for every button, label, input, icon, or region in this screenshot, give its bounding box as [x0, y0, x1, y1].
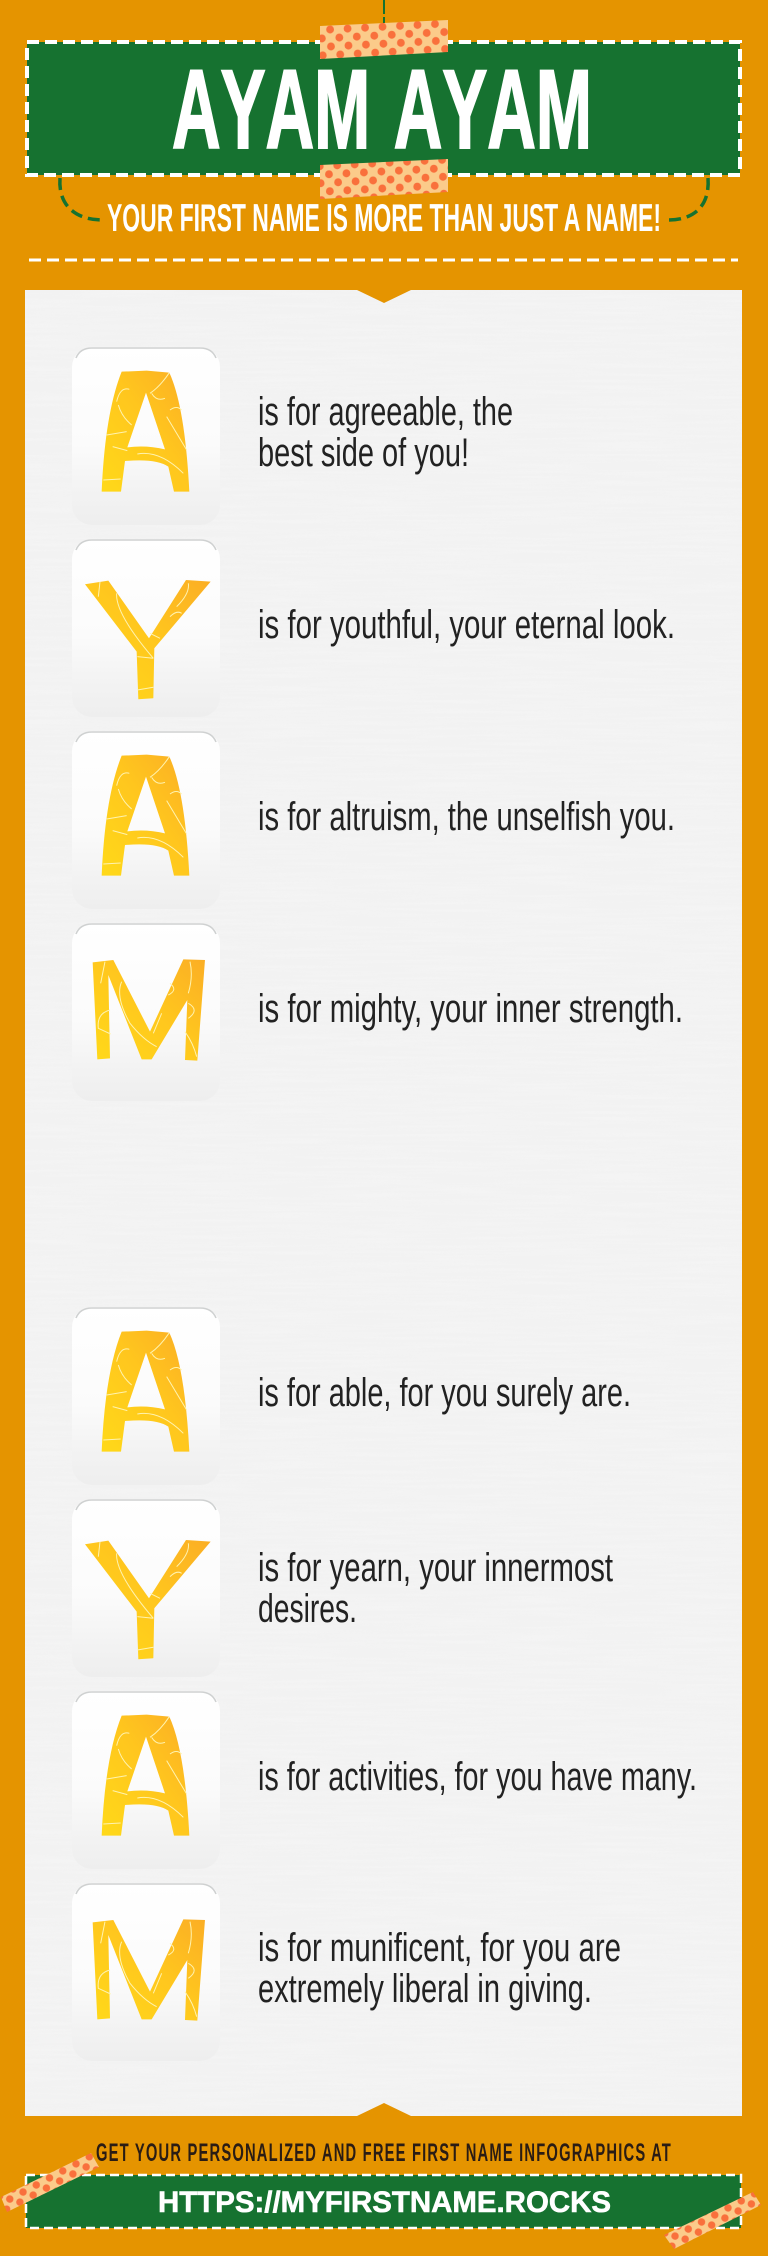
row: A activities	[72, 1691, 697, 1869]
text: is for munificent, for you are	[258, 1926, 621, 1970]
row: M munificent	[72, 1883, 621, 2061]
text	[258, 390, 513, 475]
title banner	[27, 42, 740, 175]
letter tile A	[72, 1307, 220, 1485]
main panel	[25, 290, 742, 2116]
letter tile Y	[72, 1499, 220, 1677]
row: Y yearn	[72, 1499, 613, 1677]
text: desires.	[258, 1587, 357, 1631]
letter tile M	[72, 1883, 220, 2061]
row: A altruism	[72, 731, 675, 909]
tape: footer left	[1, 2153, 99, 2212]
panel notch bottom	[357, 2103, 411, 2116]
text	[258, 1546, 613, 1631]
letter tile A	[72, 1691, 220, 1869]
letter tile M	[72, 923, 220, 1101]
text	[258, 1926, 621, 2011]
panel notch top	[357, 290, 411, 303]
text: is for agreeable, the	[258, 390, 513, 434]
text: is for yearn, your innermost	[258, 1546, 613, 1590]
letter tile Y	[72, 539, 220, 717]
row: Y youthful	[72, 539, 675, 717]
footer banner	[26, 2175, 741, 2228]
dashed connector left	[60, 178, 103, 220]
text: best side of you!	[258, 431, 469, 475]
dashed divider	[29, 258, 738, 262]
hanging string	[383, 0, 385, 24]
tape: bottom	[320, 159, 448, 199]
text: extremely liberal in giving.	[258, 1967, 592, 2011]
row: M mighty	[72, 923, 683, 1101]
text: is for able, for you surely are.	[258, 1371, 631, 1415]
tape: top	[320, 20, 448, 59]
footer url: HTTPS://MYFIRSTNAME.ROCKS	[158, 2186, 611, 2219]
row: A able	[72, 1307, 631, 1485]
row: A agreeable	[72, 347, 513, 525]
dashed connector right	[668, 178, 708, 220]
letter tile A	[72, 347, 220, 525]
tape: footer right	[664, 2192, 761, 2249]
letter tile A	[72, 731, 220, 909]
